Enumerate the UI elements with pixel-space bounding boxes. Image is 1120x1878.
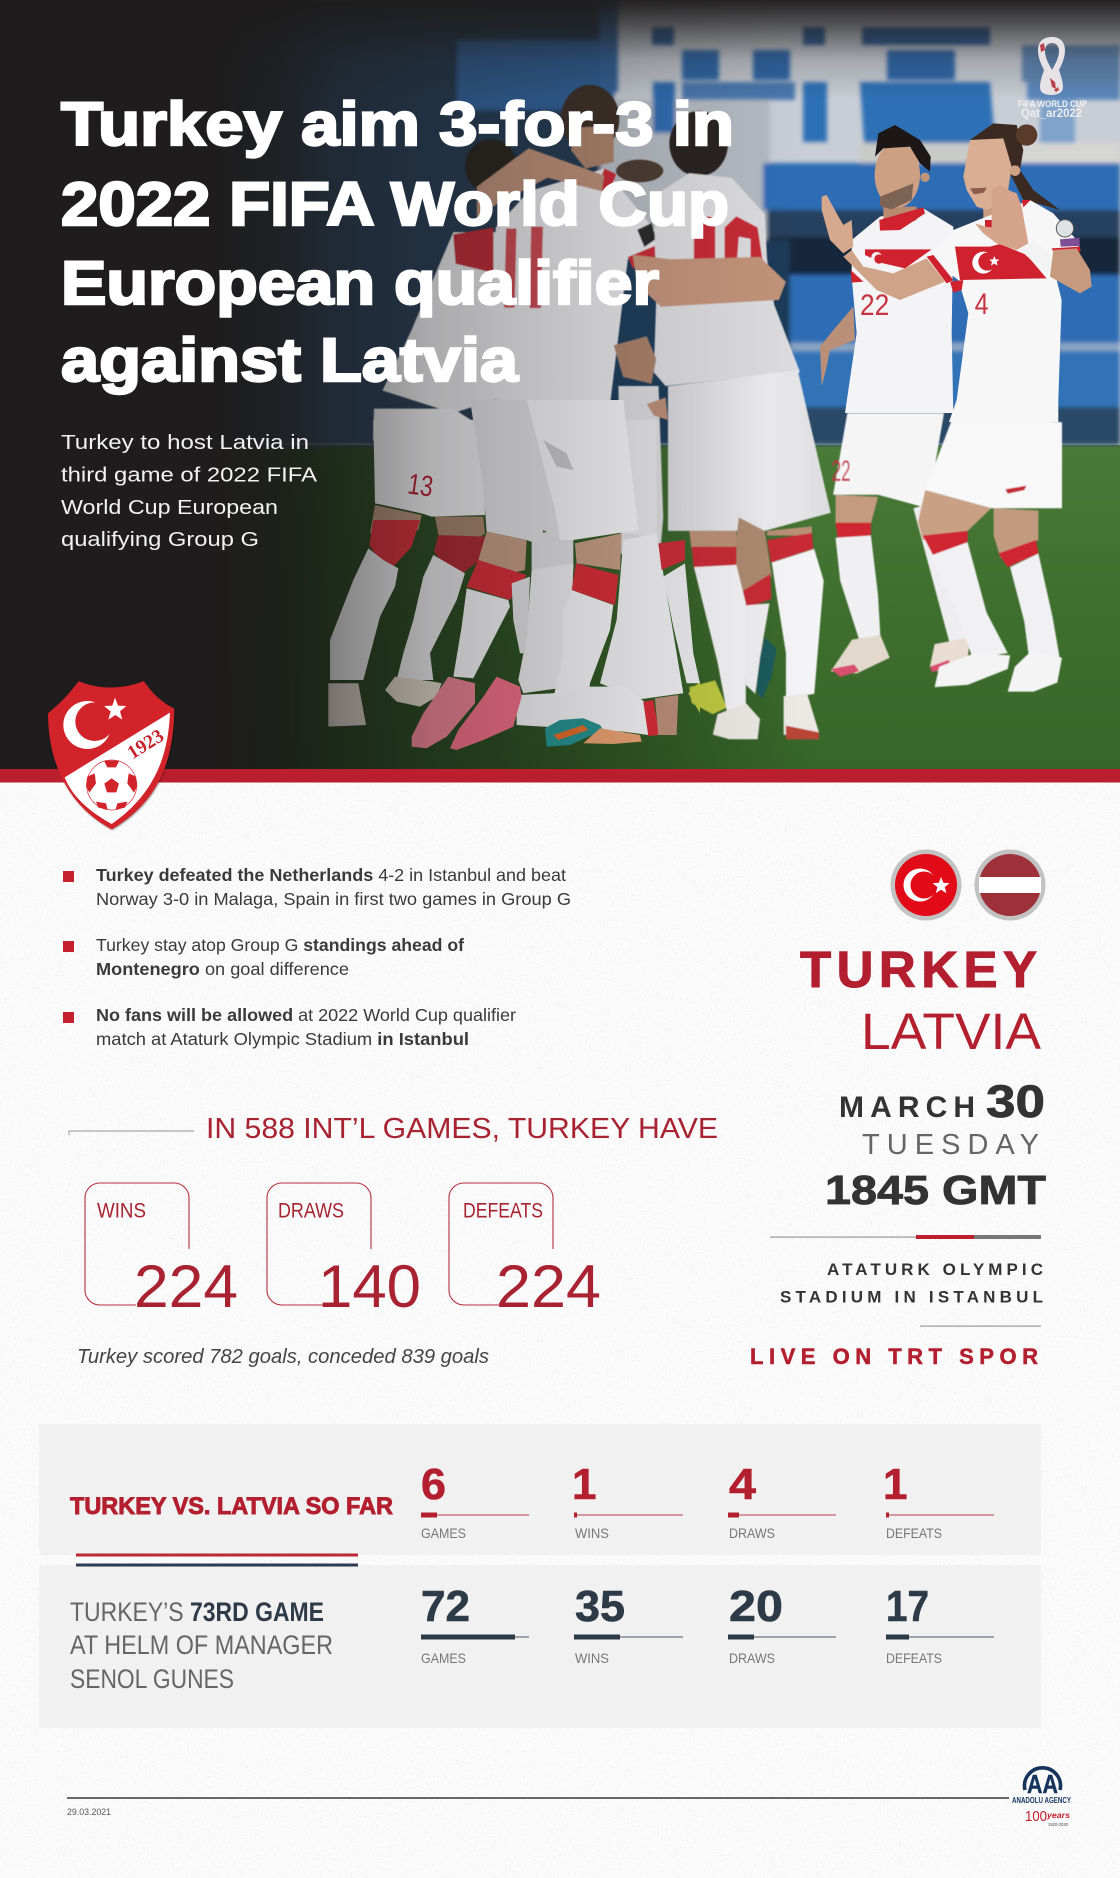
stadium stands bbox=[225, 3, 1120, 448]
stat: draws: 4 bbox=[729, 1460, 757, 1509]
stat card: draws: 140 bbox=[318, 1253, 421, 1320]
bullet list bbox=[63, 865, 571, 1049]
team names: LATVIA bbox=[861, 1003, 1041, 1060]
paper texture bbox=[0, 783, 1120, 1878]
stat: draws bbox=[728, 1582, 836, 1666]
stat card: defeats: 224 bbox=[496, 1253, 601, 1320]
logo: Anadolu Agency 100 years: years bbox=[1046, 1810, 1070, 1820]
bullet 3 bbox=[63, 1005, 516, 1049]
title: European qualifier bbox=[61, 249, 659, 317]
stat: defeats: DEFEATS bbox=[886, 1650, 942, 1666]
logo: Anadolu Agency 100 years: 1920-2020 bbox=[1048, 1822, 1068, 1827]
player 4 jersey bbox=[949, 200, 1079, 422]
stat: games bbox=[421, 1582, 529, 1666]
subtitle text: qualifying Group G bbox=[61, 528, 259, 551]
stat: draws: DRAWS bbox=[729, 1650, 775, 1666]
icon: Turkey flag bbox=[890, 850, 962, 920]
player 11 shorts bbox=[470, 400, 560, 545]
hugging arms bbox=[477, 148, 604, 218]
player 13 shorts top bbox=[373, 409, 482, 440]
bullet 2 bbox=[63, 935, 464, 979]
stat card: wins: 224 bbox=[134, 1253, 238, 1320]
stat: wins: WINS bbox=[575, 1525, 609, 1541]
dark overlay bbox=[0, 4, 740, 769]
player 4 lower body bbox=[925, 415, 1062, 508]
heading: SENOL GUNES bbox=[70, 1664, 234, 1694]
panel: manager Senol Gunes record bbox=[39, 1565, 1041, 1728]
date: 29.03.2021 bbox=[67, 1807, 111, 1818]
stat: defeats: 17 bbox=[886, 1582, 929, 1631]
date and time: 1845 GMT bbox=[825, 1167, 1046, 1213]
stat: defeats bbox=[883, 1460, 994, 1541]
date and time: MARCH bbox=[839, 1091, 975, 1124]
red divider band bbox=[0, 769, 1120, 782]
stat: defeats: 1 bbox=[883, 1460, 907, 1509]
logo: Anadolu Agency 100 years bbox=[1012, 1768, 1071, 1827]
logo: Anadolu Agency 100 years: 100 bbox=[1025, 1808, 1047, 1825]
logo: FIFA World Cup Qatar 2022: Qat_ar2022 bbox=[1021, 106, 1082, 120]
kneeling player bbox=[532, 530, 573, 573]
player 22 upper body bbox=[820, 307, 855, 387]
stat: defeats bbox=[886, 1582, 994, 1666]
player 11 shorts top bbox=[477, 402, 616, 440]
heading: AT HELM OF MANAGER bbox=[70, 1630, 333, 1660]
logo: Anadolu Agency 100 years: ANADOLU AGENCY bbox=[1012, 1795, 1071, 1805]
player 22 lower body bbox=[913, 499, 975, 649]
title: Turkey aim 3-for-3 in bbox=[61, 90, 734, 158]
stat: draws: 20 bbox=[729, 1582, 783, 1631]
date and time bbox=[825, 1076, 1046, 1213]
match info bbox=[750, 941, 1046, 1369]
venue: ATATURK OLYMPIC bbox=[827, 1260, 1043, 1279]
stat: wins bbox=[572, 1460, 683, 1541]
heading: TURKEY VS. LATVIA SO FAR bbox=[70, 1493, 393, 1520]
player 10 shorts and legs bbox=[668, 370, 831, 531]
subtitle text: World Cup European bbox=[61, 496, 278, 519]
footer rule bbox=[67, 1797, 1009, 1799]
team names bbox=[800, 941, 1041, 1060]
team names: TURKEY bbox=[800, 941, 1037, 998]
bullet 3: match at Ataturk Olympic Stadium in Istanbul bbox=[96, 1029, 469, 1049]
players: right side upper bodies bbox=[820, 123, 1092, 422]
logo: Turkish Football Federation badge bbox=[48, 681, 174, 829]
panel: hero photo of Turkish players celebrating bbox=[0, 0, 1120, 772]
stat: games: GAMES bbox=[421, 1525, 466, 1541]
player 11 jersey bbox=[494, 168, 656, 400]
bullet 1: Norway 3-0 in Malaga, Spain in first two games in Group G bbox=[96, 889, 571, 909]
stat: games: 6 bbox=[421, 1460, 446, 1509]
players: right side lower bodies: 22 bbox=[832, 455, 851, 488]
bullet 3: No fans will be allowed at 2022 World Cup qualifier bbox=[96, 1005, 516, 1025]
subtitle text: third game of 2022 FIFA bbox=[61, 464, 317, 486]
players: centre group upper bodies bbox=[373, 85, 800, 572]
subtitle text: Turkey to host Latvia in bbox=[61, 431, 309, 454]
flags: Turkey and Latvia bbox=[890, 850, 1046, 920]
all-time record heading: IN 588 INT’L GAMES, TURKEY HAVE bbox=[206, 1113, 718, 1145]
logo: Turkish Football Federation badge: 1923 bbox=[124, 726, 168, 764]
title: 2022 FIFA World Cup bbox=[61, 170, 729, 238]
stat card: wins: WINS bbox=[97, 1200, 146, 1222]
bullet 2: Turkey stay atop Group G standings ahead of bbox=[96, 935, 464, 955]
goals note: Turkey scored 782 goals, conceded 839 goals bbox=[77, 1346, 489, 1368]
boots bbox=[689, 680, 727, 714]
players: centre group legs: 13 bbox=[406, 468, 435, 504]
bullet 1 bbox=[63, 865, 571, 909]
stat card: defeats bbox=[449, 1183, 601, 1320]
stat: wins: WINS bbox=[575, 1650, 609, 1666]
stat: wins: 35 bbox=[575, 1582, 625, 1631]
raised arm and hands bbox=[843, 250, 945, 300]
bullet 1: Turkey defeated the Netherlands 4-2 in Istanbul and beat bbox=[96, 865, 566, 885]
logo: FIFA World Cup Qatar 2022: FIFA WORLD CUP bbox=[1018, 99, 1087, 109]
stat: games: 72 bbox=[421, 1582, 470, 1631]
stat: wins: 1 bbox=[572, 1460, 596, 1509]
venue: STADIUM IN ISTANBUL bbox=[780, 1288, 1043, 1306]
panel: Turkey vs. Latvia so far bbox=[39, 1424, 1041, 1555]
stat: draws bbox=[728, 1460, 836, 1541]
logo: Anadolu Agency 100 years: AA bbox=[1027, 1769, 1058, 1799]
venue bbox=[780, 1260, 1043, 1306]
panel separator stripes bbox=[76, 1554, 358, 1566]
divider bbox=[770, 1235, 1041, 1239]
stat: wins bbox=[574, 1582, 683, 1666]
players: right side lower bodies bbox=[668, 370, 1062, 739]
stat: games: GAMES bbox=[421, 1650, 466, 1666]
broadcaster: LIVE ON TRT SPOR bbox=[750, 1344, 1038, 1369]
heading: TURKEY’S 73RD GAME bbox=[70, 1597, 324, 1627]
stat card: draws: DRAWS bbox=[278, 1200, 344, 1222]
players: centre group legs bbox=[328, 400, 700, 750]
players: right side upper bodies: 22 bbox=[860, 289, 889, 322]
boots bbox=[412, 677, 475, 748]
legs bbox=[478, 532, 527, 573]
logo: FIFA World Cup Qatar 2022 bbox=[1018, 37, 1087, 120]
icon: Latvia flag bbox=[974, 850, 1046, 920]
bullet 2: Montenegro on goal difference bbox=[96, 959, 349, 979]
title: against Latvia bbox=[61, 326, 519, 394]
stat: draws: DRAWS bbox=[729, 1525, 775, 1541]
heading bbox=[70, 1597, 333, 1694]
stat: defeats: DEFEATS bbox=[886, 1525, 942, 1541]
far left player jersey bbox=[382, 232, 496, 413]
stat card: defeats: DEFEATS bbox=[463, 1200, 543, 1222]
players: right side upper bodies: 4 bbox=[975, 288, 989, 321]
subtitle text bbox=[61, 431, 317, 551]
stat card: draws bbox=[267, 1183, 421, 1320]
player 10 head and jersey bbox=[669, 111, 728, 176]
stat card: wins bbox=[85, 1183, 238, 1320]
stat: games bbox=[421, 1460, 529, 1541]
title bbox=[61, 90, 734, 394]
date and time: 30 bbox=[986, 1076, 1045, 1127]
player 4 hair and head bbox=[970, 123, 1060, 210]
date and time: TUESDAY bbox=[862, 1129, 1039, 1161]
